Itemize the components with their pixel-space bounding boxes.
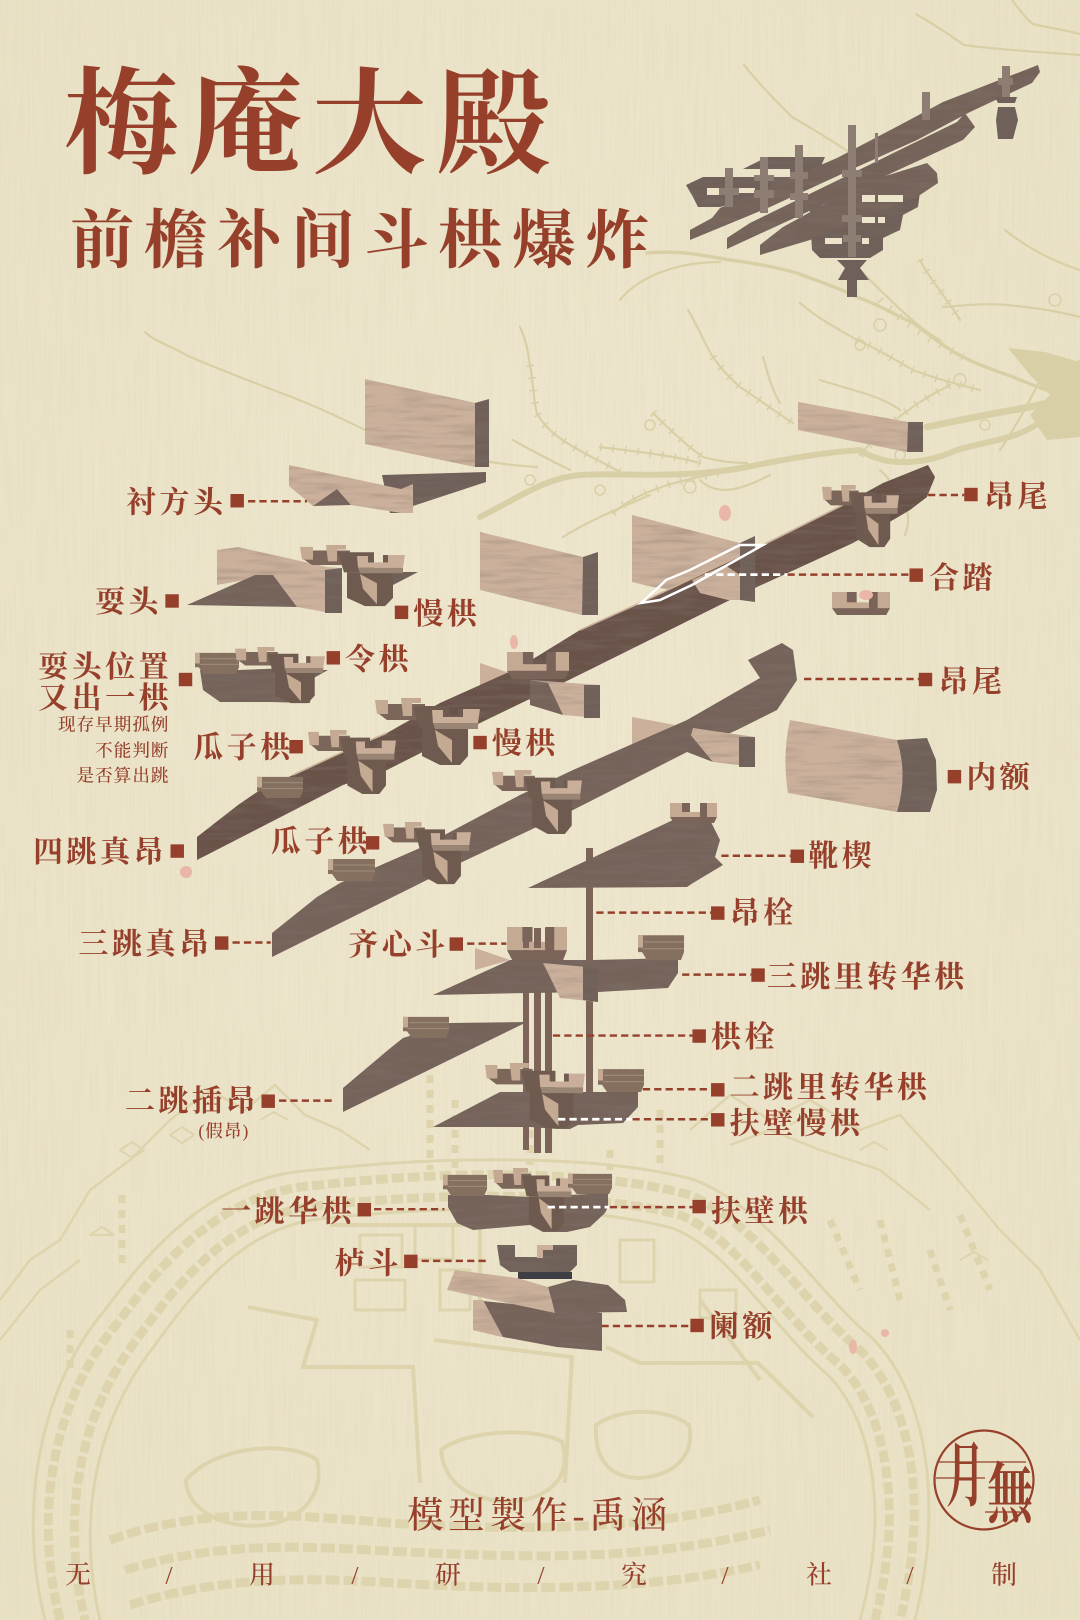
label: 瓜子栱 lower: 瓜子栱 bbox=[271, 826, 371, 859]
label: 阑额 bbox=[601, 1310, 776, 1343]
label: 昂尾 top bbox=[928, 480, 1051, 513]
beam: 三跳真昂 bbox=[272, 643, 797, 957]
label: 慢栱 upper: 慢栱 bbox=[413, 598, 480, 631]
block: 合踏 board bbox=[632, 515, 740, 600]
footer: organisation line bbox=[65, 1560, 1017, 1589]
label: 慢栱 lower: 慢栱 bbox=[492, 727, 559, 760]
label: 四跳真昂: 四跳真昂 bbox=[33, 836, 167, 869]
background: plum branches bbox=[145, 0, 1080, 537]
label: 二跳里转华栱: 二跳里转华栱 bbox=[730, 1072, 931, 1105]
footer: organisation line: 制 bbox=[991, 1560, 1017, 1589]
title: 梅庵大殿 bbox=[64, 61, 560, 188]
seal logo: 無 bbox=[987, 1459, 1035, 1532]
阑额 bbox=[447, 1270, 627, 1351]
bracket sets on 四跳真昂 bbox=[257, 485, 899, 798]
二跳插昂 bbox=[343, 1017, 527, 1112]
label: 二跳里转华栱 bbox=[643, 1072, 931, 1105]
footer: organisation line: 研 bbox=[435, 1560, 461, 1589]
label: 合踏 bbox=[705, 562, 996, 595]
block: lower center board front bbox=[530, 680, 600, 718]
footer: organisation line: / bbox=[537, 1560, 545, 1589]
exploded bracket model bbox=[180, 65, 1040, 1532]
label: 衬方头 bbox=[126, 487, 307, 520]
block: top tall board bbox=[365, 379, 489, 467]
合踏 board front wedge and end grain bbox=[692, 536, 755, 602]
block: upper right board bbox=[798, 402, 923, 452]
label: 昂栓 bbox=[596, 897, 797, 930]
三跳里转华栱 piece bbox=[433, 927, 684, 1002]
block: 衬方头 bbox=[289, 465, 486, 513]
label: 耍头: 耍头 bbox=[95, 586, 162, 619]
label: 令栱: 令栱 bbox=[345, 644, 412, 677]
label: 栌斗: 栌斗 bbox=[335, 1247, 402, 1280]
label: 齐心斗 bbox=[348, 929, 506, 962]
label: 耍头位置又出一栱: 又出一栱 bbox=[38, 682, 172, 715]
label: 栌斗 bbox=[335, 1247, 488, 1280]
footer: organisation line: / bbox=[906, 1560, 914, 1589]
label: 耍头位置又出一栱: 不能判断 bbox=[95, 741, 169, 761]
footer: organisation line: / bbox=[721, 1560, 729, 1589]
label: 耍头位置又出一栱 bbox=[38, 651, 192, 785]
label: 栱栓: 栱栓 bbox=[711, 1021, 778, 1054]
二跳里转华栱 piece bbox=[433, 1063, 644, 1129]
label: 齐心斗: 齐心斗 bbox=[348, 929, 449, 962]
label: 二跳插昂: 二跳插昂 bbox=[125, 1085, 259, 1118]
footer: organisation line: 究 bbox=[621, 1560, 647, 1589]
label: 耍头位置又出一栱: 是否算出跳 bbox=[77, 765, 169, 785]
栌斗 bbox=[497, 1245, 577, 1279]
label: 二跳插昂: (假昂) bbox=[198, 1121, 249, 1141]
label: 扶壁慢栱: 扶壁慢栱 bbox=[730, 1108, 864, 1141]
footer: organisation line: 用 bbox=[249, 1560, 275, 1589]
icon: assembled bracket set thumbnail bbox=[686, 65, 1040, 297]
label: 靴楔 bbox=[721, 840, 875, 873]
footer: organisation line: / bbox=[351, 1560, 359, 1589]
bracket sets on 三跳真昂 bbox=[328, 770, 582, 884]
label: 合踏: 合踏 bbox=[929, 562, 996, 595]
credit: model maker: 模型製作-禹涵 bbox=[407, 1496, 672, 1536]
令栱 piece bbox=[195, 647, 328, 703]
一跳华栱 piece bbox=[443, 1168, 612, 1232]
label: 耍头位置又出一栱: 耍头位置 bbox=[38, 651, 172, 684]
beam: 四跳真昂 bbox=[197, 465, 935, 860]
label: 三跳里转华栱: 三跳里转华栱 bbox=[767, 961, 968, 994]
footer: organisation line: / bbox=[165, 1560, 173, 1589]
靴楔 bbox=[528, 803, 723, 888]
seal logo bbox=[934, 1430, 1035, 1532]
label: 昂尾 lower: 昂尾 bbox=[938, 665, 1005, 698]
内额 bbox=[785, 720, 937, 812]
label: 瓜子栱 upper: 瓜子栱 bbox=[193, 732, 294, 765]
block: center board bbox=[480, 532, 598, 615]
label: 三跳真昂: 三跳真昂 bbox=[79, 928, 212, 961]
label: 昂尾 lower bbox=[804, 665, 1005, 698]
栱栓 rods bbox=[523, 928, 552, 1153]
subtitle: 前檐补间斗栱爆炸 bbox=[70, 206, 659, 277]
label: 内额: 内额 bbox=[966, 762, 1033, 795]
block: third board front bbox=[687, 728, 755, 767]
footer: organisation line: 社 bbox=[806, 1560, 832, 1589]
beam highlight edge bbox=[293, 505, 843, 775]
block: lower center board back bbox=[480, 663, 530, 700]
label: 衬方头: 衬方头 bbox=[126, 487, 227, 520]
label: 阑额: 阑额 bbox=[709, 1310, 776, 1343]
耍头 piece bbox=[187, 545, 418, 613]
block: small dou with petal bbox=[832, 592, 890, 615]
footer: organisation line: 无 bbox=[65, 1560, 91, 1589]
block: third board back bbox=[632, 717, 675, 745]
label: 栱栓 bbox=[553, 1021, 778, 1054]
label: 一跳华栱: 一跳华栱 bbox=[221, 1196, 355, 1229]
label: 靴楔: 靴楔 bbox=[808, 840, 875, 873]
highlight: 合踏 white outline bbox=[641, 545, 763, 603]
label: 扶壁栱 bbox=[548, 1196, 811, 1229]
label: 耍头位置又出一栱: 现存早期孤例 bbox=[58, 715, 169, 735]
label: 二跳插昂 bbox=[125, 1085, 336, 1141]
label: 三跳真昂 bbox=[79, 928, 271, 961]
昂栓 rod bbox=[586, 848, 593, 1092]
label: 昂栓: 昂栓 bbox=[730, 897, 797, 930]
petals bbox=[180, 505, 889, 1354]
seal logo: 月 bbox=[946, 1438, 984, 1516]
label: 一跳华栱 bbox=[221, 1196, 444, 1229]
label: 扶壁栱: 扶壁栱 bbox=[711, 1196, 811, 1229]
label: 扶壁慢栱 bbox=[558, 1108, 864, 1141]
label: 昂尾 top: 昂尾 bbox=[984, 480, 1051, 513]
background: old city map bbox=[0, 1075, 1080, 1620]
